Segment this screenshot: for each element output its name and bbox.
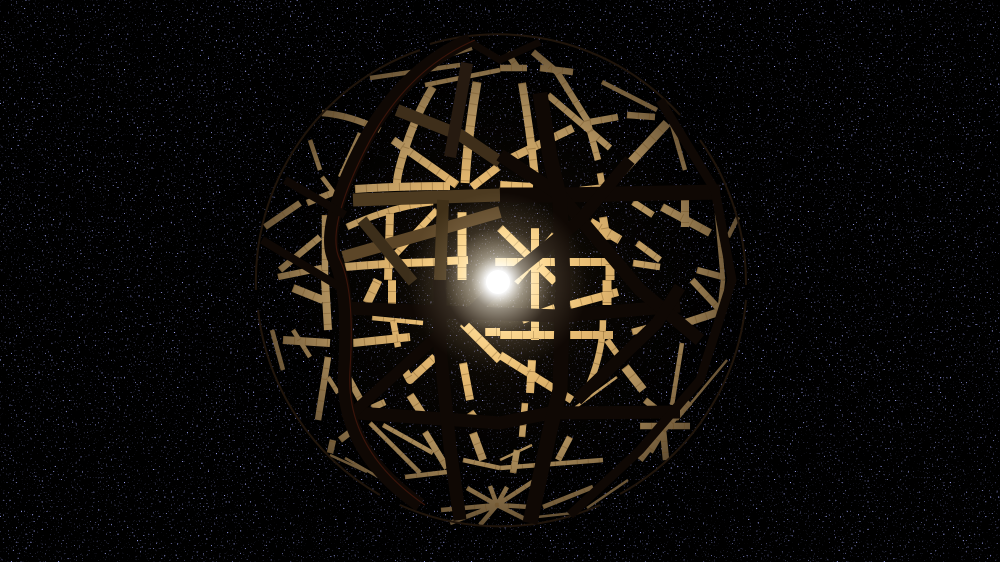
sphere: dim front bands — [343, 63, 500, 282]
sphere: lit inner strips — [265, 48, 738, 525]
sun: bright core — [486, 270, 510, 294]
sphere: dark front bands — [262, 40, 732, 523]
sphere: outer rim arcs — [256, 34, 746, 526]
glow: warm light inside sphere — [278, 62, 718, 502]
sun: central glow — [408, 192, 588, 372]
